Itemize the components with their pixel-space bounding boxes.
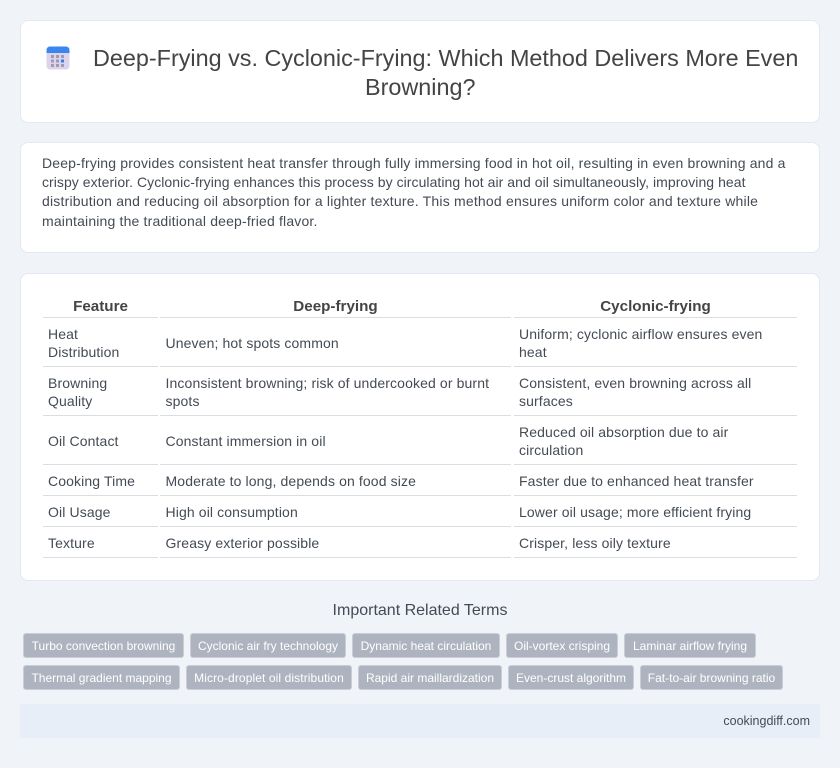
row: cooking time: [48, 473, 754, 489]
row: browning quality: Browning: [48, 375, 107, 391]
icon: calendar: [46, 46, 70, 70]
row: texture: Texture: [48, 535, 95, 551]
row: oil usage: Oil Usage: [48, 504, 111, 520]
table header: Feature: [73, 298, 128, 315]
intro text panel: [20, 142, 820, 253]
row: heat distribution: Heat: [48, 326, 78, 342]
row: texture: Greasy exterior possible: [166, 535, 319, 551]
row: heat distribution: Distribution: [48, 344, 119, 360]
related terms heading: Important Related Terms: [333, 602, 507, 619]
row: oil contact: [48, 424, 728, 458]
row: browning quality: Inconsistent browning; risk of undercooked or burnt: [166, 375, 489, 391]
row: cooking time: Cooking Time: [48, 473, 135, 489]
title heading: [93, 45, 798, 100]
comparison table panel: [20, 273, 820, 581]
row: oil contact: Oil Contact: [48, 433, 119, 449]
row: oil usage: High oil consumption: [166, 504, 298, 520]
row: oil contact: circulation: [519, 442, 583, 458]
row: browning quality: surfaces: [519, 393, 573, 409]
row: heat distribution: [48, 326, 762, 360]
intro paragraph: distribution and reducing oil absorption for a lighter texture. This method ensures uniform color and texture while: [42, 193, 758, 209]
related terms chips: Micro-droplet oil distribution: [194, 671, 344, 685]
table header: Cyclonic-frying: [600, 298, 711, 315]
footer source: cookingdiff.com: [723, 714, 810, 728]
row: oil contact: Constant immersion in oil: [166, 433, 326, 449]
table header: [73, 298, 711, 315]
row: texture: Crisper, less oily texture: [519, 535, 671, 551]
title panel: [20, 20, 820, 123]
row: cooking time: Faster due to enhanced heat transfer: [519, 473, 754, 489]
row: browning quality: spots: [166, 393, 200, 409]
related terms chips: Rapid air maillardization: [366, 671, 494, 685]
row: oil usage: [48, 504, 751, 520]
row: cooking time: Moderate to long, depends on food size: [166, 473, 416, 489]
intro paragraph: crispy exterior. Cyclonic-frying enhances this process by circulating hot air and oil simultaneously, improving heat: [42, 174, 746, 190]
row: oil contact: Reduced oil absorption due to air: [519, 424, 728, 440]
related terms chips: Laminar airflow frying: [633, 639, 747, 653]
related terms chips: Dynamic heat circulation: [361, 639, 491, 653]
title heading: Deep-Frying vs. Cyclonic-Frying: Which Method Delivers More Even: [93, 45, 798, 71]
row: heat distribution: heat: [519, 344, 547, 360]
row: oil usage: Lower oil usage; more efficient frying: [519, 504, 751, 520]
related terms chips: Cyclonic air fry technology: [198, 639, 338, 653]
title heading: Browning?: [365, 74, 475, 100]
row: texture: [48, 535, 671, 551]
footer bar: [20, 704, 820, 738]
row: heat distribution: Uneven; hot spots common: [166, 335, 339, 351]
row: browning quality: Consistent, even browning across all: [519, 375, 751, 391]
related terms chips: Oil-vortex crisping: [514, 639, 610, 653]
intro paragraph: maintaining the traditional deep-fried flavor.: [42, 213, 318, 229]
table header: Deep-frying: [293, 298, 378, 315]
row: browning quality: Quality: [48, 393, 92, 409]
row: heat distribution: Uniform; cyclonic airflow ensures even: [519, 326, 762, 342]
related terms chips: Turbo convection browning: [32, 639, 175, 653]
related terms chips: Fat-to-air browning ratio: [648, 671, 775, 685]
related terms chips: Even-crust algorithm: [516, 671, 626, 685]
related terms chips: [23, 633, 783, 690]
row: browning quality: [48, 375, 751, 409]
intro paragraph: Deep-frying provides consistent heat transfer through fully immersing food in hot oil, resulting in even browning and a: [42, 155, 786, 171]
related terms chips: Thermal gradient mapping: [31, 671, 172, 685]
intro paragraph: [42, 155, 786, 229]
